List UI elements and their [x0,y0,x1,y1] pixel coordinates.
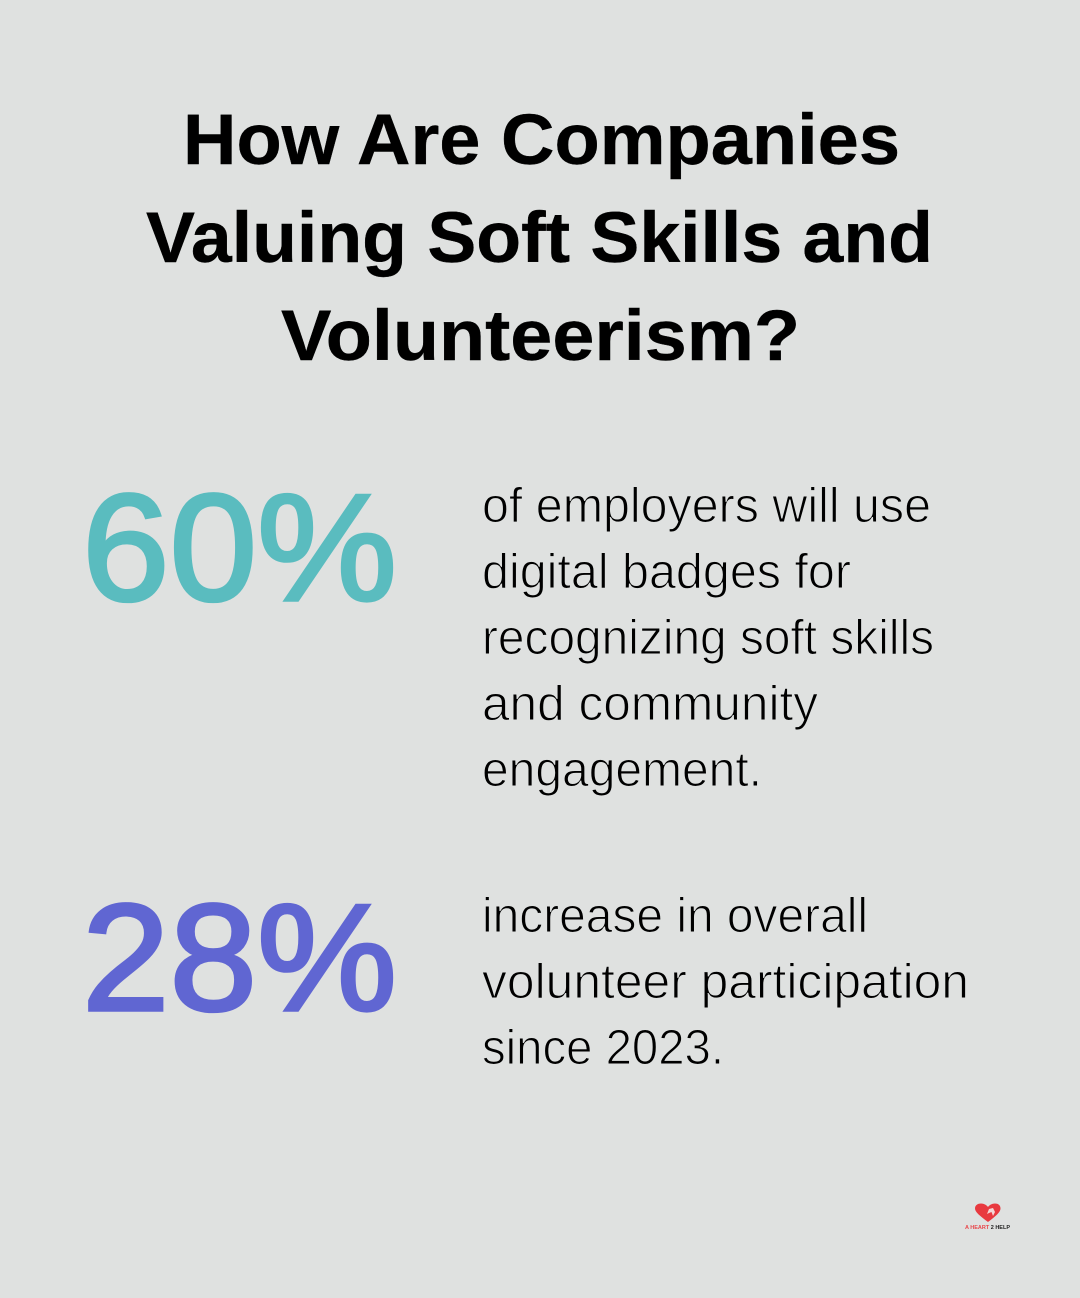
statistic: 60%: 60% [82,463,397,633]
text block: volunteer participation statistic description: since 2023. [482,1021,724,1075]
text block: volunteer participation statistic description [482,889,969,1075]
title [146,101,933,376]
text block: digital badges statistic description [482,479,934,797]
text block: digital badges statistic description: digital badges for [482,545,851,599]
icon: heart with hands [975,1204,1000,1222]
title: Volunteerism? [281,297,800,376]
title: How Are Companies [183,101,900,180]
logo text: A HEART 2 HELP [965,1225,1010,1231]
title: Valuing Soft Skills and [146,199,933,278]
text block: digital badges statistic description: and community [482,677,818,731]
text block: digital badges statistic description: recognizing soft skills [482,611,934,665]
text block: digital badges statistic description: of employers will use [482,479,931,533]
statistic: 28%: 28% [82,873,397,1043]
text block: volunteer participation statistic description: increase in overall [482,889,868,943]
logo: A Heart 2 Help [965,1204,1010,1231]
text block: volunteer participation statistic description: volunteer participation [482,955,969,1009]
text block: digital badges statistic description: engagement. [482,743,762,797]
